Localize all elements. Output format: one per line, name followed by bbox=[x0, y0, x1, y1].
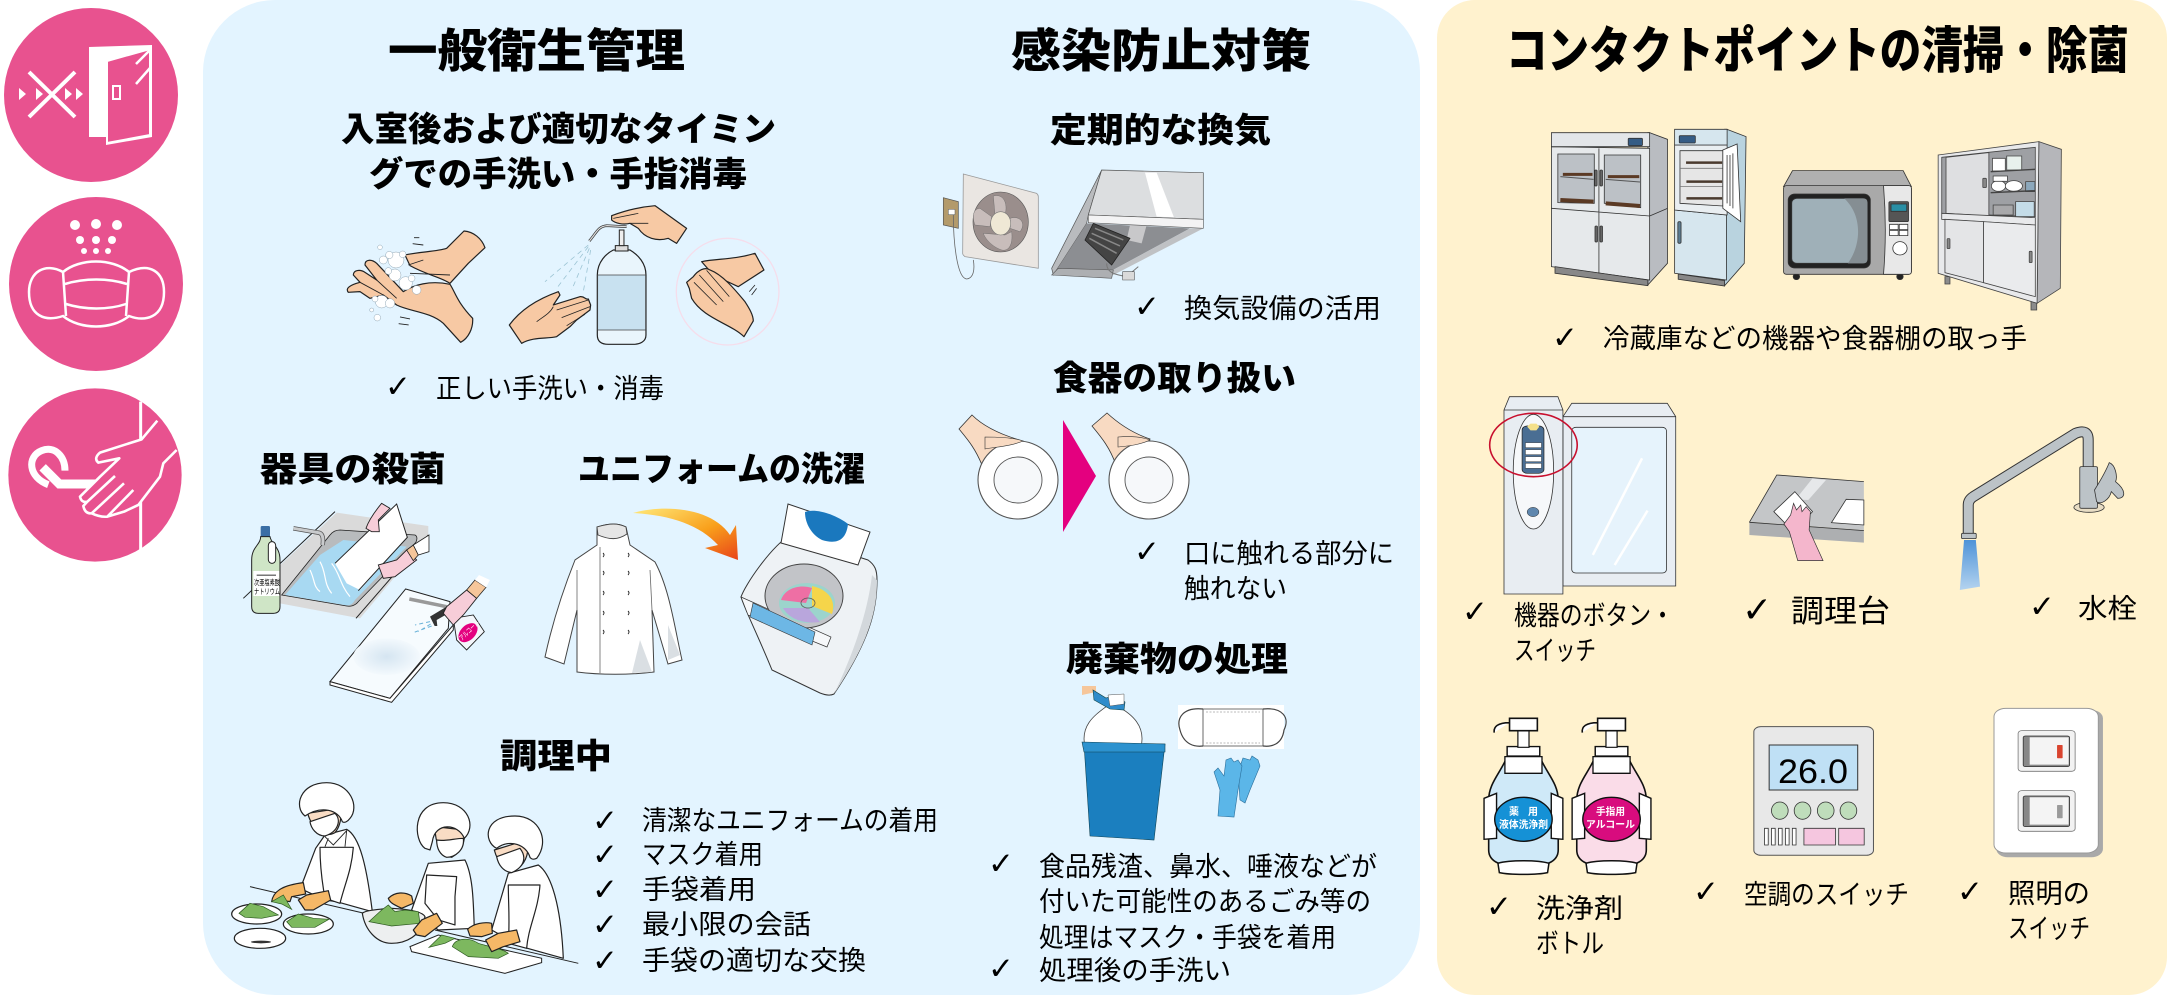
illustration: waste bin and bag bbox=[1082, 686, 1165, 840]
spray bottle label text: アルコール bbox=[458, 619, 481, 642]
checklist: refrigerator and cabinet handles: ✓ bbox=[1552, 320, 1578, 356]
checklist: equipment buttons and switches: スイッチ bbox=[1514, 636, 1596, 666]
bottle label text: 液体洗浄剤 bbox=[1499, 818, 1548, 831]
illustration: ventilation fan and range hood bbox=[943, 170, 1203, 280]
illustration: hand washing and disinfection bbox=[347, 206, 779, 345]
illustration: cooks preparing food bbox=[232, 783, 578, 973]
checklist: during cooking: ✓ bbox=[592, 837, 618, 873]
arrow: pink triangle bbox=[1063, 420, 1096, 532]
panel: contact point cleaning background bbox=[1437, 0, 2167, 995]
icon: sanitizer bottle with hands bbox=[509, 206, 687, 344]
checklist: detergent bottles bbox=[1486, 889, 1623, 959]
checklist: air conditioner switch: 空調のスイッチ bbox=[1744, 880, 1909, 910]
arrow: jacket into washing machine bbox=[633, 509, 738, 560]
heading: uniform washing: ユニフォームの洗濯 bbox=[578, 451, 865, 489]
icon: cutting board and spray bbox=[330, 575, 490, 702]
illustration: wiping cooking table bbox=[1749, 475, 1864, 561]
icon: plate held bbox=[959, 415, 1058, 519]
small bowls of greens bbox=[232, 895, 333, 948]
icon: hand on door handle bbox=[8, 388, 182, 562]
checklist: cooking table: ✓ bbox=[1742, 590, 1772, 631]
checklist: light switch: ✓ bbox=[1957, 874, 1983, 910]
checklist: faucet: ✓ bbox=[2029, 589, 2055, 625]
checklist: detergent bottles: 洗浄剤 bbox=[1536, 894, 1623, 924]
icon: mask with droplets bbox=[9, 197, 183, 371]
icon: plate held correctly bbox=[1092, 413, 1189, 519]
checklist: during cooking: 手袋着用 bbox=[642, 875, 756, 905]
checklist: do not touch the mouth area: 触れない bbox=[1184, 574, 1287, 604]
icon: microwave oven bbox=[1784, 171, 1911, 280]
checklist: during cooking: ✓ bbox=[592, 907, 618, 943]
illustration: refrigerators, microwave and cabinet bbox=[1551, 129, 2061, 310]
icon: open door refrigerator bbox=[1675, 129, 1746, 286]
checklist: use ventilation equipment: 換気設備の活用 bbox=[1184, 294, 1381, 324]
checklist: detergent bottles: ボトル bbox=[1536, 929, 1604, 959]
illustration: equipment buttons bbox=[1490, 397, 1676, 594]
checklist: correct hand washing bbox=[385, 369, 664, 405]
checklist: faucet: 水栓 bbox=[2078, 594, 2137, 624]
callout: red circle around buttons bbox=[1490, 413, 1577, 477]
checklist: waste handling: 処理後の手洗い bbox=[1039, 956, 1231, 986]
checklist: do not touch the mouth area: ✓ bbox=[1134, 534, 1160, 570]
checklist: equipment buttons and switches: 機器のボタン・ bbox=[1514, 601, 1674, 631]
bottle label text: 薬 用 bbox=[1509, 805, 1538, 818]
illustration: washing machine bbox=[741, 504, 877, 695]
checklist: during cooking: 最小限の会話 bbox=[642, 910, 811, 940]
heading: hand washing timing bbox=[341, 111, 776, 194]
checklist: light switch: 照明の bbox=[2008, 879, 2090, 909]
heading: waste disposal: 廃棄物の処理 bbox=[1066, 641, 1288, 679]
illustration: light switch bbox=[1994, 708, 2103, 857]
checklist: light switch bbox=[1957, 874, 2090, 944]
bottle label text: 次亜塩素酸 bbox=[254, 577, 280, 587]
checklist: light switch: スイッチ bbox=[2008, 914, 2090, 944]
checklist: during cooking: 清潔なユニフォームの着用 bbox=[642, 806, 938, 836]
checklist: during cooking bbox=[592, 803, 938, 979]
title: general hygiene management: 一般衛生管理 bbox=[388, 25, 685, 77]
checklist: during cooking: 手袋の適切な交換 bbox=[642, 946, 866, 976]
heading: hand washing timing: グでの手洗い・手指消毒 bbox=[369, 155, 747, 194]
checklist: use ventilation equipment bbox=[1134, 289, 1381, 325]
bottle label text: 手指用 bbox=[1596, 805, 1625, 818]
checklist: detergent bottles: ✓ bbox=[1486, 889, 1512, 925]
checklist: waste handling: ✓ bbox=[988, 951, 1014, 987]
icon: do not enter door bbox=[4, 8, 178, 182]
icon: wall fan bbox=[943, 174, 1038, 279]
icon: detergent bottle bbox=[1484, 718, 1563, 874]
checklist: waste handling: 食品残渣、鼻水、唾液などが bbox=[1039, 852, 1377, 882]
checklist: during cooking: ✓ bbox=[592, 803, 618, 839]
checklist: during cooking: ✓ bbox=[592, 872, 618, 908]
checklist: air conditioner switch bbox=[1693, 874, 1909, 910]
illustration: air conditioner controller bbox=[1754, 727, 1873, 855]
bottle label text: アルコール bbox=[1586, 819, 1635, 831]
checklist: use ventilation equipment: ✓ bbox=[1134, 289, 1160, 325]
checklist: refrigerator and cabinet handles: 冷蔵庫などの機器や食器棚の取っ手 bbox=[1603, 324, 2027, 354]
temperature display: 26.0 bbox=[1778, 753, 1848, 791]
checklist: waste handling bbox=[988, 846, 1377, 987]
bottle label text: ナトリウム bbox=[254, 587, 280, 596]
checklist: waste handling: 処理はマスク・手袋を着用 bbox=[1039, 923, 1336, 953]
checklist: faucet bbox=[2029, 589, 2137, 625]
checklist: during cooking: マスク着用 bbox=[642, 840, 763, 870]
cook 3 bbox=[468, 816, 563, 958]
icon: rubbing hands in circle bbox=[676, 238, 779, 345]
icon: double door refrigerator bbox=[1551, 133, 1667, 286]
cook 1 bbox=[272, 783, 372, 912]
icon: range hood bbox=[1052, 170, 1203, 280]
cook 2 bbox=[388, 803, 474, 930]
cutting board with greens bbox=[410, 930, 542, 973]
icon: alcohol bottle bbox=[1572, 718, 1651, 874]
bottle label text bbox=[1499, 805, 1635, 831]
checklist: equipment buttons and switches bbox=[1462, 594, 1674, 666]
heading: handling tableware: 食器の取り扱い bbox=[1053, 360, 1296, 398]
checklist: air conditioner switch: ✓ bbox=[1693, 874, 1719, 910]
heading: during cooking: 調理中 bbox=[500, 738, 612, 776]
heading: hand washing timing: 入室後および適切なタイミン bbox=[341, 111, 776, 149]
checklist: correct hand washing: ✓ bbox=[385, 369, 411, 405]
icon: dish cabinet bbox=[1938, 142, 2061, 310]
checklist: waste handling: 付いた可能性のあるごみ等の bbox=[1039, 887, 1371, 917]
title: infection prevention: 感染防止対策 bbox=[1011, 25, 1311, 77]
checklist: during cooking: ✓ bbox=[592, 943, 618, 979]
bowl of greens bbox=[362, 905, 442, 943]
icon: sodium hypochlorite bottle bbox=[252, 526, 280, 613]
illustration: blue gloves bbox=[1214, 756, 1260, 817]
bottle label text bbox=[254, 577, 280, 596]
panel: general hygiene and infection prevention background bbox=[203, 0, 1420, 995]
heading: utensil sterilization: 器具の殺菌 bbox=[260, 451, 446, 489]
checklist: do not touch the mouth area bbox=[1134, 534, 1394, 604]
illustration: chef jacket bbox=[545, 524, 682, 674]
checklist: cooking table bbox=[1742, 590, 1890, 631]
icon: soapy hands bbox=[347, 231, 485, 342]
checklist: cooking table: 調理台 bbox=[1791, 594, 1890, 629]
illustration: water faucet bbox=[1960, 432, 2124, 590]
checklist: equipment buttons and switches: ✓ bbox=[1462, 594, 1488, 630]
heading: regular ventilation: 定期的な換気 bbox=[1050, 112, 1271, 150]
checklist: do not touch the mouth area: 口に触れる部分に bbox=[1184, 539, 1394, 569]
illustration: disposable mask bbox=[1178, 705, 1286, 749]
checklist: waste handling: ✓ bbox=[988, 846, 1014, 882]
illustration: plate handling bbox=[959, 413, 1189, 532]
illustration: sterilizing utensils bbox=[243, 503, 490, 702]
illustration: detergent and alcohol bottles bbox=[1484, 718, 1651, 874]
checklist: correct hand washing: 正しい手洗い・消毒 bbox=[436, 374, 664, 404]
